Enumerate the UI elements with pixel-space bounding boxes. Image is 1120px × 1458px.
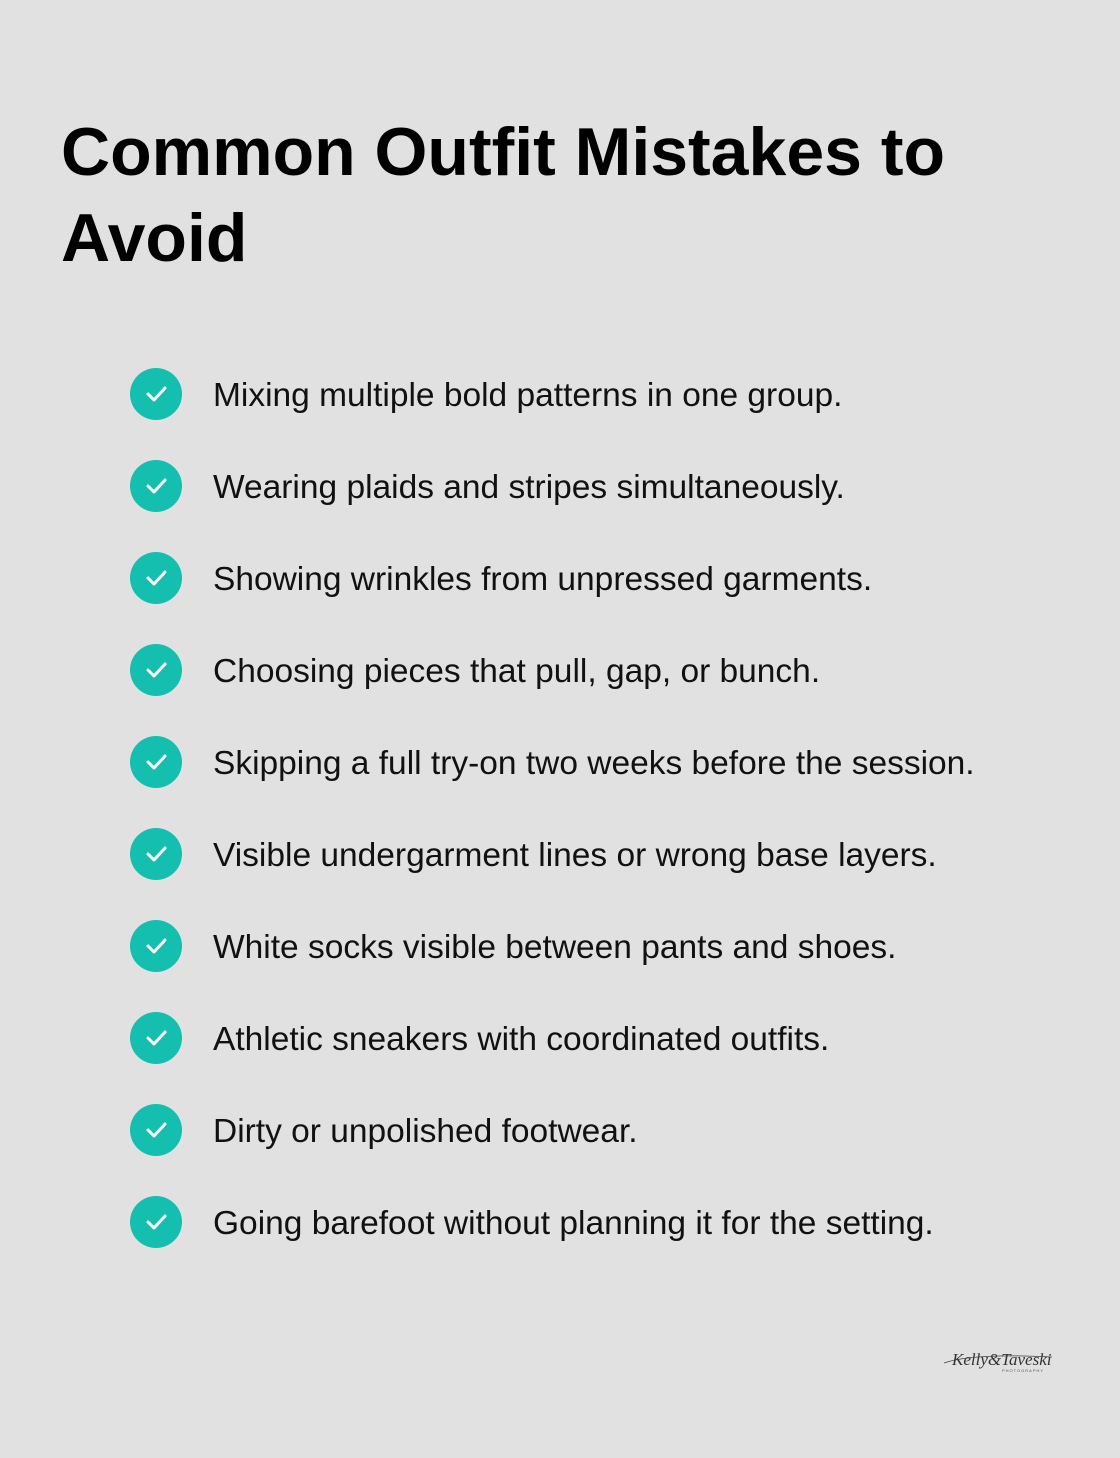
item 1: [130, 368, 842, 420]
item 8: [130, 1012, 829, 1064]
logo: signature: Kelly&Taveski: [951, 1350, 1052, 1369]
logo: signature: PHOTOGRAPHY: [1002, 1368, 1044, 1373]
item 9: Dirty or unpolished footwear.: [213, 1113, 638, 1150]
item 9: [130, 1104, 638, 1156]
item 8: Athletic sneakers with coordinated outfits.: [213, 1021, 829, 1058]
title: Common Outfit Mistakes to: [61, 114, 945, 190]
item 3: Showing wrinkles from unpressed garments.: [213, 561, 872, 598]
checklist: [130, 368, 975, 1248]
item 1: Mixing multiple bold patterns in one group.: [213, 377, 842, 414]
item 3: [130, 552, 872, 604]
item 5: Skipping a full try-on two weeks before the session.: [213, 745, 975, 782]
item 6: Visible undergarment lines or wrong base layers.: [213, 837, 937, 874]
item 5: [130, 736, 975, 788]
item 7: White socks visible between pants and shoes.: [213, 929, 896, 966]
item 4: Choosing pieces that pull, gap, or bunch.: [213, 653, 820, 690]
item 6: [130, 828, 937, 880]
title: [61, 114, 945, 276]
item 2: [130, 460, 845, 512]
item 4: [130, 644, 820, 696]
title: Avoid: [61, 200, 247, 276]
item 2: Wearing plaids and stripes simultaneously.: [213, 469, 845, 506]
item 7: [130, 920, 896, 972]
item 10: Going barefoot without planning it for the setting.: [213, 1205, 934, 1242]
item 10: [130, 1196, 934, 1248]
